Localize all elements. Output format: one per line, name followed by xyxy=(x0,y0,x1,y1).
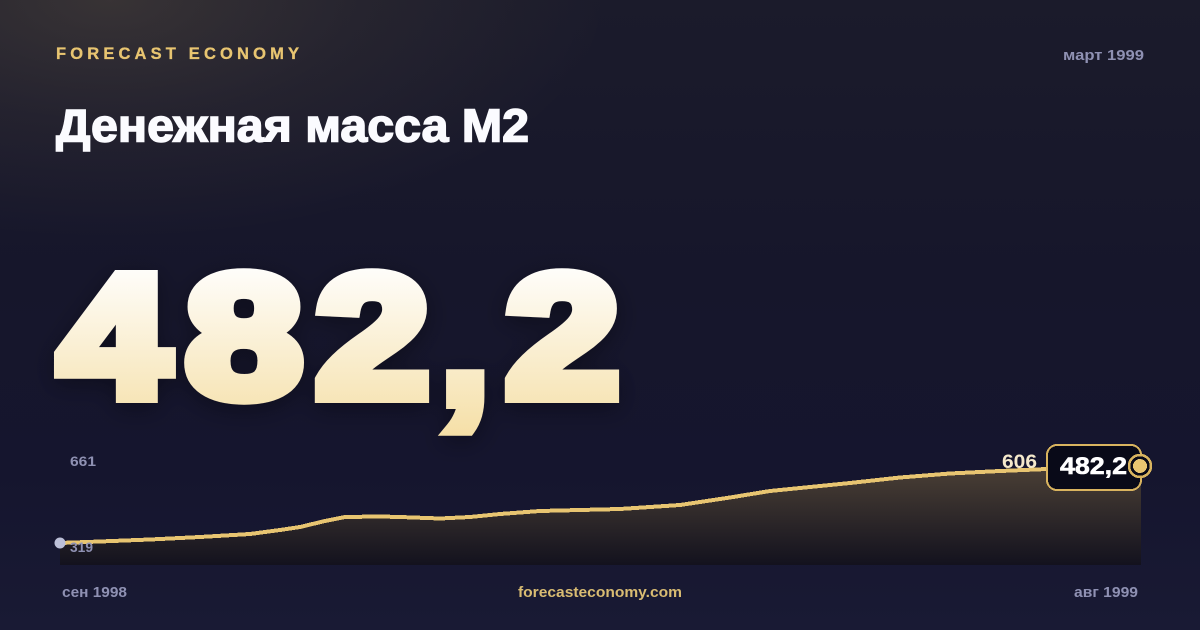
chart line xyxy=(60,469,1047,543)
brand label: FORECAST ECONOMY xyxy=(56,45,299,63)
big number: 8 xyxy=(186,239,302,433)
start date: сен 1998 xyxy=(62,584,127,601)
axis min: 319 xyxy=(70,539,93,555)
big number xyxy=(59,239,619,439)
end date: авг 1999 xyxy=(1074,584,1138,601)
current value callout xyxy=(1047,445,1151,490)
current value callout: 482,2 xyxy=(1060,453,1127,480)
axis max: 661 xyxy=(70,453,96,469)
title: Денежная масса М2 xyxy=(56,100,529,152)
area chart xyxy=(54,466,1141,565)
site url: forecasteconomy.com xyxy=(518,584,682,601)
chart area fill xyxy=(60,466,1141,565)
peak value: 606 xyxy=(1002,452,1037,473)
big number: 2 xyxy=(506,239,619,433)
end marker xyxy=(1129,455,1151,477)
big number: , xyxy=(441,245,489,439)
big number: 4 xyxy=(59,239,169,433)
start point xyxy=(54,538,66,548)
date label: март 1999 xyxy=(1063,47,1144,64)
big number: 2 xyxy=(316,239,429,433)
